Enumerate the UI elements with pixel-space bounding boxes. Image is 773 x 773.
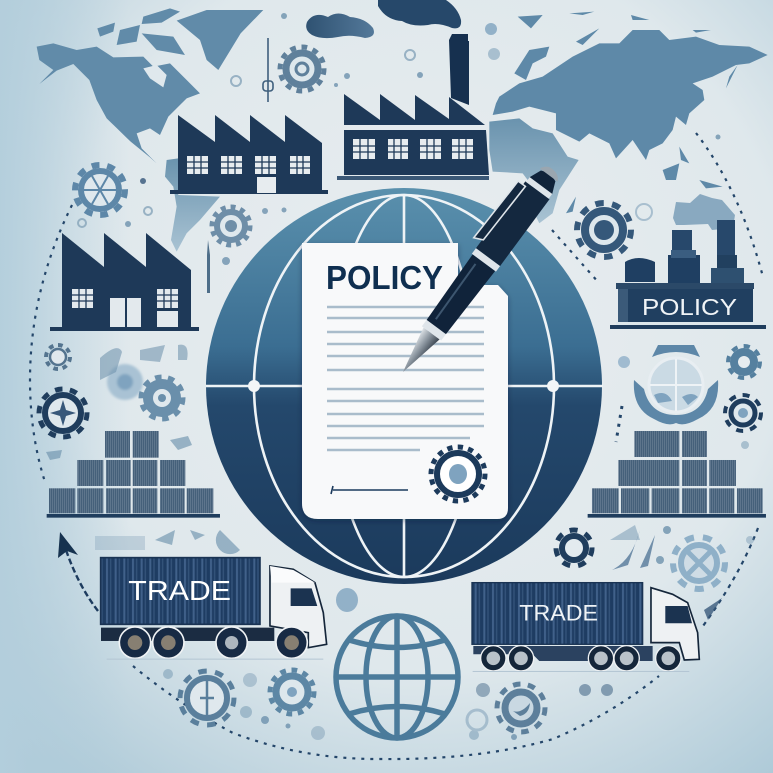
map: islands bbox=[514, 12, 738, 213]
plant chimneys bbox=[625, 220, 744, 283]
wheels bbox=[481, 646, 681, 671]
central globe bbox=[206, 188, 603, 584]
gear: top bbox=[280, 47, 324, 91]
container stack: right bbox=[588, 431, 766, 518]
map: eurasia bbox=[493, 30, 768, 160]
gear: dark centre right bbox=[556, 530, 592, 566]
document text lines bbox=[327, 307, 484, 450]
plant label: POLICY bbox=[642, 294, 737, 320]
smoke clouds bbox=[306, 0, 461, 38]
icon: seal gear bbox=[431, 447, 485, 501]
policy plant bbox=[610, 194, 766, 329]
wheels bbox=[119, 627, 307, 658]
gear: under factory bbox=[212, 207, 250, 245]
world map bbox=[37, 8, 768, 252]
gear: blurred left bbox=[107, 364, 143, 400]
label: TRADE bbox=[128, 575, 231, 606]
gear: light right bbox=[673, 537, 725, 589]
map: south america bbox=[165, 158, 220, 252]
policy document bbox=[302, 243, 508, 519]
gear: dark left bbox=[39, 389, 87, 437]
factory: left bbox=[50, 233, 199, 331]
plant smoke bbox=[673, 194, 735, 230]
gear: mid left bbox=[141, 377, 183, 419]
tool: small pen bbox=[207, 240, 210, 293]
label: TRADE bbox=[519, 600, 598, 625]
factory: top left bbox=[170, 115, 328, 194]
tool: thin vertical bbox=[263, 38, 273, 102]
gear: bottom right bbox=[497, 684, 545, 732]
cloud right bbox=[378, 0, 461, 28]
container bbox=[101, 558, 260, 624]
arrow bbox=[58, 532, 98, 611]
container stack: left bbox=[47, 431, 220, 518]
pen bbox=[385, 156, 565, 381]
bottom globe icon bbox=[336, 616, 458, 738]
cab bbox=[651, 588, 699, 660]
globe nodes bbox=[248, 380, 559, 392]
gear: small left bbox=[46, 345, 70, 369]
gear: dark right bbox=[577, 203, 631, 257]
truck: left bbox=[101, 558, 327, 660]
cab bbox=[270, 566, 327, 648]
dashed route circle bbox=[30, 133, 763, 759]
document title: POLICY bbox=[326, 259, 443, 296]
blobs left and top bbox=[46, 13, 358, 740]
container bbox=[472, 583, 643, 644]
map: north america bbox=[37, 8, 200, 163]
gear: bottom left bbox=[180, 671, 234, 725]
gear: bottom centre left bbox=[270, 670, 314, 714]
plant platform bbox=[616, 283, 754, 289]
signature line bbox=[331, 486, 408, 494]
truck: right bbox=[472, 583, 699, 672]
grid lines bbox=[206, 195, 603, 577]
gear: dark lower right bbox=[725, 395, 761, 431]
chassis bbox=[101, 628, 274, 641]
gear: right of globe bbox=[728, 346, 760, 378]
factory: top center with chimney bbox=[337, 34, 489, 180]
emblem bbox=[634, 345, 718, 424]
map: greenland bbox=[177, 10, 263, 70]
chassis bbox=[473, 646, 653, 661]
blobs right bbox=[405, 23, 754, 740]
gear: wheel bbox=[75, 165, 125, 215]
cloud left bbox=[306, 14, 374, 38]
map: africa bbox=[489, 118, 579, 223]
